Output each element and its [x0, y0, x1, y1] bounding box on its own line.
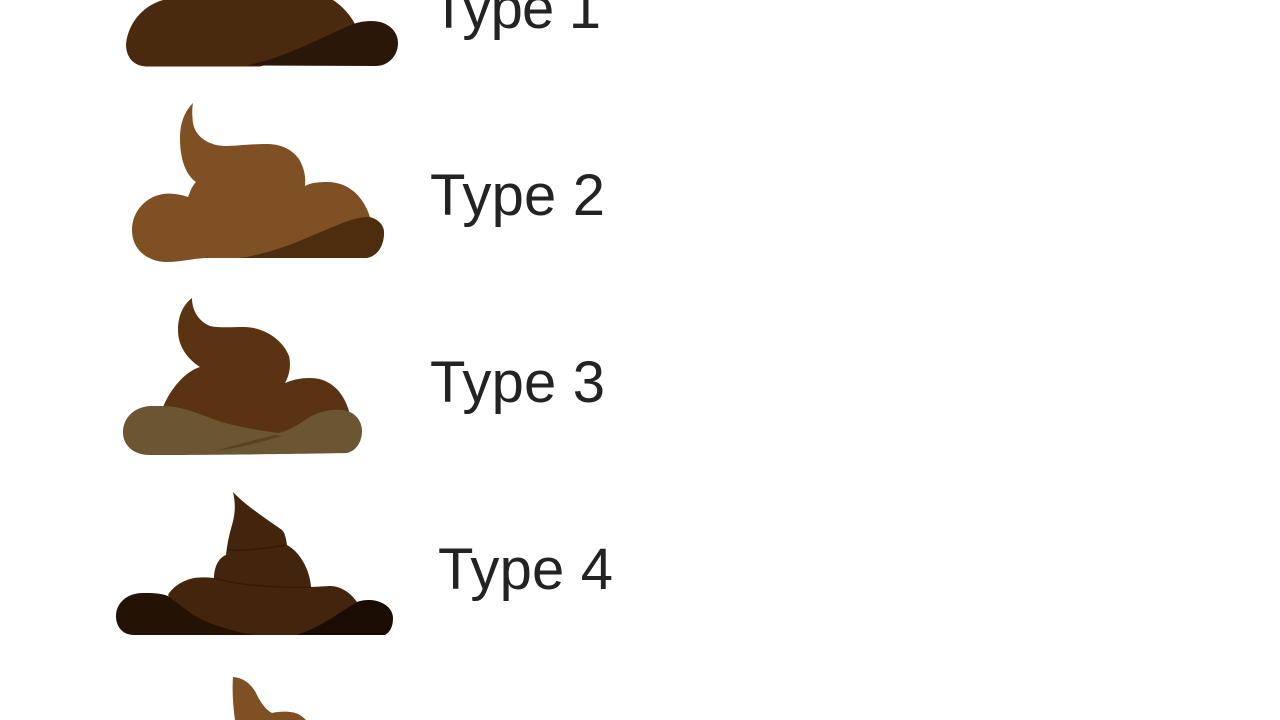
- label: type 3: Type 3: [430, 350, 605, 415]
- label: type 2: Type 2: [430, 163, 605, 228]
- icon: type 2 stool: [132, 103, 384, 262]
- icon: type 5 stool (cropped): [233, 677, 306, 720]
- icon: type 1 stool: [126, 0, 398, 66]
- icon: type 4 stool: [116, 492, 393, 635]
- icon: type 3 stool: [123, 298, 362, 455]
- label: type 4: Type 4: [438, 537, 613, 602]
